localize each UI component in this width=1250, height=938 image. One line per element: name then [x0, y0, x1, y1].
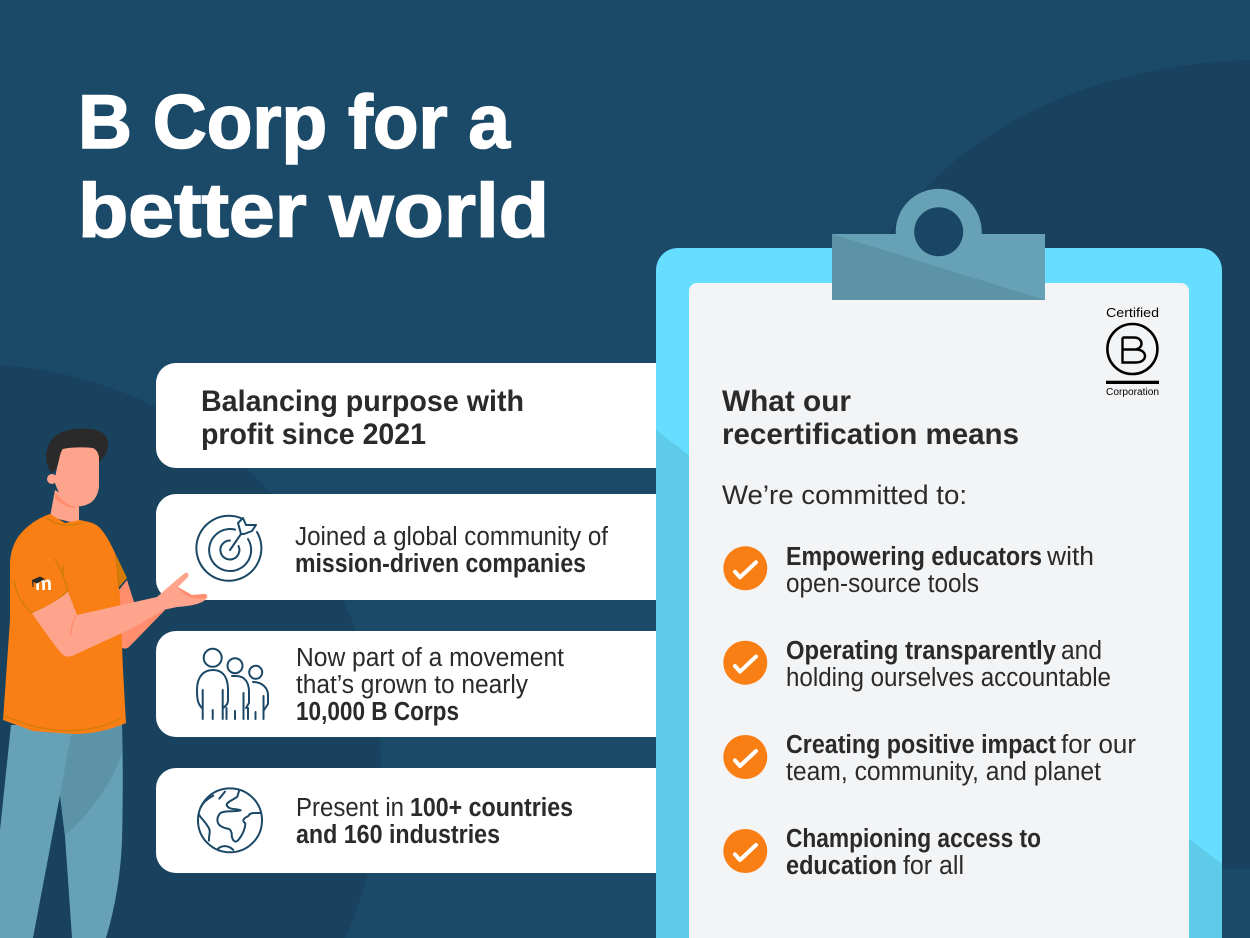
head — [46, 429, 108, 506]
clipboard heading: What our — [722, 385, 852, 418]
commitment: empowering educators — [723, 543, 1094, 598]
panel: global community card: mission-driven companies — [295, 550, 586, 578]
panel: global community card: Joined a global community of — [295, 523, 609, 551]
panel: movement card — [156, 631, 656, 737]
clipboard heading: recertification means — [722, 418, 1019, 451]
panel: countries card: and 160 industries — [296, 821, 500, 849]
panel: movement card: 10,000 B Corps — [296, 698, 459, 726]
commitment: creating positive impact: team, community, and planet — [786, 758, 1101, 786]
certified B corporation logo: Certified — [1106, 305, 1159, 320]
neck — [50, 490, 79, 524]
panel: balancing purpose card: profit since 2021 — [201, 418, 426, 451]
panel: balancing purpose card — [156, 363, 656, 468]
shirt — [3, 514, 126, 734]
certified B corporation logo: Corporation — [1106, 387, 1159, 398]
committed subheading: We’re committed to: — [722, 480, 967, 510]
icon: globe — [198, 788, 262, 852]
certified B corporation logo — [1106, 305, 1159, 398]
panel: movement card: that’s grown to nearly — [296, 671, 528, 699]
commitment: championing access: Championing access to — [786, 825, 1041, 853]
panel: movement card: Now part of a movement — [296, 644, 564, 672]
commitment: operating transparently: holding ourselves accountable — [786, 664, 1111, 692]
clipboard clip — [832, 189, 1045, 300]
panel: global community card — [156, 494, 656, 600]
title: B Corp for a — [78, 80, 511, 165]
shirt seams — [5, 518, 120, 731]
commitment: creating positive impact: Creating positive impact — [786, 731, 1056, 759]
commitment: creating positive impact — [723, 731, 1137, 786]
title: better world — [78, 168, 549, 254]
panel: countries card: Present in — [296, 794, 404, 822]
clipboard paper — [689, 283, 1189, 938]
clipboard board — [656, 248, 1222, 938]
icon: group of people — [197, 649, 268, 719]
commitment: operating transparently: Operating transparently — [786, 637, 1057, 665]
commitment: championing access: education — [786, 852, 897, 880]
shirt logo: m — [35, 574, 52, 595]
commitment: empowering educators: open-source tools — [786, 570, 979, 598]
commitment: empowering educators: Empowering educators — [786, 543, 1042, 571]
commitment: championing access: for all — [903, 852, 964, 880]
panel: countries card — [156, 768, 656, 873]
commitment: operating transparently: and — [1061, 637, 1102, 665]
clipboard heading — [722, 385, 1019, 451]
icon: target with arrow — [196, 516, 261, 581]
front arm and hand — [32, 573, 207, 657]
commitment: creating positive impact: for our — [1061, 731, 1137, 759]
trousers — [0, 725, 123, 938]
back arm — [119, 580, 165, 649]
panel: balancing purpose card: Balancing purpose with — [201, 385, 524, 418]
commitment: championing access — [723, 825, 1041, 880]
commitment: operating transparently — [723, 637, 1111, 692]
illustration: man in orange shirt — [0, 429, 207, 938]
commitment: empowering educators: with — [1046, 543, 1094, 571]
panel: clipboard — [656, 189, 1222, 938]
title — [78, 80, 549, 254]
panel: countries card: 100+ countries — [410, 794, 573, 822]
